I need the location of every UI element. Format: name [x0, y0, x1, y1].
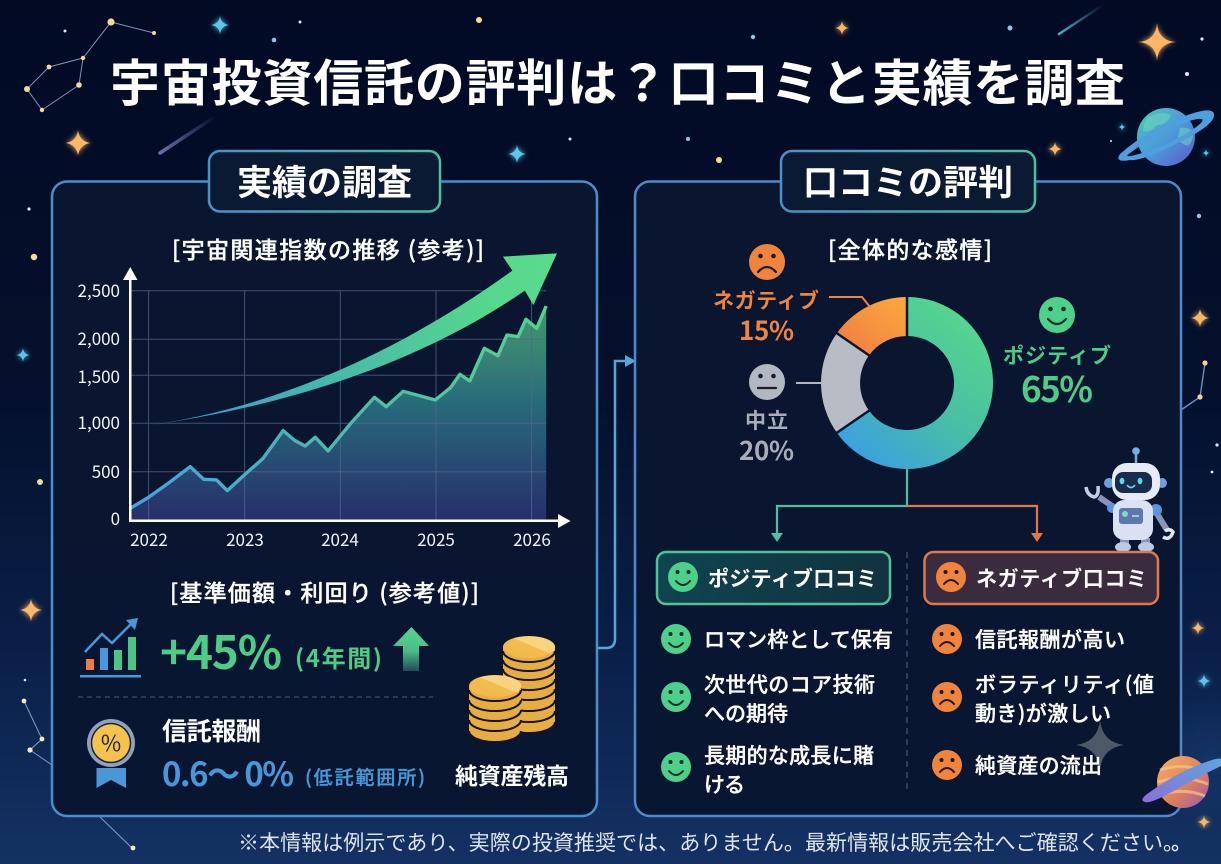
label: ネガティブ 15% [713, 285, 819, 348]
header: ネガティブ口コミ: ネガティブ口コミ [976, 563, 1147, 593]
review: ロマン枠として保有: ロマン枠として保有 [704, 624, 893, 654]
title: 宇宙投資信託の評判は？口コミと実績を調査 [110, 44, 1125, 116]
label: 中立 20% [739, 405, 794, 468]
chart y-axis labels: 2,000 [78, 325, 120, 350]
stat: +45%: (4年間) [295, 639, 382, 674]
review: 次世代のコア技術への期待 [661, 669, 875, 728]
chart y-axis labels: 2,500 [78, 277, 120, 302]
review: ボラティリティ(値動き)が激しい [932, 669, 1154, 728]
heading: 実績の調査: 実績の調査 [237, 155, 412, 206]
label: ネガティブ 15%: 15% [739, 311, 794, 348]
icon: neutral face [749, 364, 785, 400]
chart y-axis labels: 1,000 [78, 409, 120, 434]
review: 純資産の流出: 純資産の流出 [975, 750, 1102, 780]
chart x-axis labels: 2022 [130, 526, 168, 551]
heading: 実績の調査 [209, 151, 440, 212]
icon: negative face [749, 244, 785, 280]
decoration: shooting stars [160, 5, 1103, 153]
panel: 口コミの評判 [635, 151, 1181, 816]
stat: +45% [160, 617, 382, 683]
stat: trust fee: (低託範囲所) [305, 763, 425, 790]
heading: 口コミの評判: 口コミの評判 [803, 155, 1013, 206]
chart x-axis labels: 2023 [226, 526, 264, 551]
heading: 口コミの評判 [781, 151, 1035, 212]
header: ネガティブ口コミ [924, 552, 1158, 604]
review: 信託報酬が高い: 信託報酬が高い [975, 624, 1125, 654]
icon: percent medal: % [101, 726, 121, 758]
donut chart: sentiment [821, 296, 993, 469]
icon: percent medal [87, 719, 135, 788]
positive reviews column [657, 552, 893, 799]
label: ポジティブ 65%: ポジティブ [1003, 340, 1111, 370]
header: ポジティブ口コミ: ポジティブ口コミ [708, 563, 877, 593]
negative reviews column [924, 552, 1158, 780]
icon: orange ringed planet [1142, 756, 1221, 808]
chart x-axis labels [130, 526, 551, 551]
stat: trust fee [162, 712, 425, 796]
review: 長期的な成長に賭ける: ける [704, 769, 745, 799]
icon: up arrow [393, 627, 429, 671]
stat: +45%: +45% [160, 617, 282, 683]
chart y-axis labels: 0 [111, 505, 120, 530]
label: 純資産残高: 純資産残高 [455, 757, 569, 791]
review: ボラティリティ(値動き)が激しい: ボラティリティ(値 [975, 669, 1154, 699]
chart axes [123, 267, 570, 528]
review: 次世代のコア技術への期待: への期待 [704, 698, 788, 728]
icon: positive face [1039, 297, 1075, 333]
review: 長期的な成長に賭ける [661, 740, 874, 799]
icon: growth bars [80, 618, 141, 678]
sparkle over negative list [1076, 721, 1124, 769]
panel: 実績の調査 [52, 151, 597, 816]
decoration: lower-left constellation [22, 699, 135, 850]
review: ボラティリティ(値動き)が激しい: 動き)が激しい [975, 698, 1111, 728]
footnote: ※本情報は例示であり、実際の投資推奨では、ありません。最新情報は販売会社へご確認ください。 [238, 827, 1184, 857]
icon: teal ringed planet [1118, 108, 1214, 166]
chart x-axis labels: 2024 [321, 526, 359, 551]
label: ポジティブ 65%: 65% [1021, 362, 1093, 413]
tree connector arrows [771, 469, 1043, 542]
line chart: space index [78, 253, 570, 551]
chart subtitle: [宇宙関連指数の推移 (参考)] [172, 231, 484, 265]
chart y-axis labels [78, 277, 120, 530]
icon: robot [1086, 447, 1173, 552]
review: 長期的な成長に賭ける: 長期的な成長に賭 [704, 740, 874, 770]
label: ネガティブ 15%: ネガティブ [713, 285, 819, 315]
icon: coin stacks [469, 636, 555, 742]
stat: trust fee: 0.6〜 0% [162, 748, 294, 796]
stat: trust fee: 信託報酬 [162, 712, 261, 748]
decoration: right constellation [1181, 360, 1208, 410]
decoration: top-left constellation [24, 18, 156, 112]
connector arrow between panels [597, 355, 636, 648]
chart x-axis labels: 2026 [513, 526, 551, 551]
label: ポジティブ 65% [1003, 340, 1111, 413]
growth arrow [139, 253, 557, 427]
chart y-axis labels: 1,500 [78, 363, 120, 388]
chart y-axis labels: 500 [92, 458, 120, 483]
review: 次世代のコア技術への期待: 次世代のコア技術 [704, 669, 875, 699]
subtitle: 基準価額・利回り: [基準価額・利回り (参考値)] [170, 574, 479, 608]
label: 中立 20%: 中立 [745, 405, 788, 435]
chart subtitle: [全体的な感情] [828, 231, 992, 265]
chart x-axis labels: 2025 [417, 526, 455, 551]
header: ポジティブ口コミ [657, 552, 890, 604]
label: 中立 20%: 20% [739, 431, 794, 468]
